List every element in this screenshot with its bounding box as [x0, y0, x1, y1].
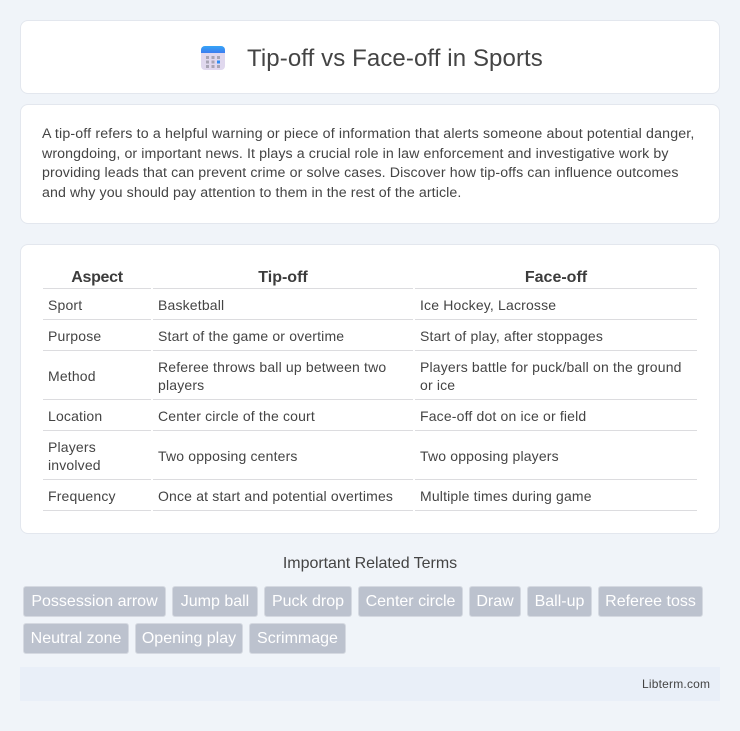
tag: [358, 586, 463, 617]
tag: [135, 623, 243, 654]
row: sport: [48, 297, 556, 313]
row: location: Location: [48, 408, 102, 424]
tag: Ball-up: [535, 593, 584, 610]
intro paragraph: [42, 126, 694, 201]
tag: [172, 586, 258, 617]
tag: Neutral zone: [31, 630, 121, 647]
tag: Opening play: [142, 630, 236, 647]
row: players involved: involved: [48, 457, 101, 473]
row: frequency: Once at start and potential overtimes: [158, 488, 393, 504]
tag: [249, 623, 346, 654]
footer credit: Libterm.com: [642, 677, 710, 691]
row: purpose: Start of the game or overtime: [158, 328, 344, 344]
intro paragraph: and why you should pay attention to them in the rest of the article.: [42, 185, 461, 201]
row: method: players: [158, 377, 204, 393]
panel: comparison table: [20, 244, 720, 534]
row: sport: Basketball: [158, 297, 224, 313]
intro paragraph: A tip-off refers to a helpful warning or piece of information that alerts someone about potential danger,: [42, 126, 694, 142]
row: location: [48, 408, 586, 424]
tag: [469, 586, 521, 617]
tag: [264, 586, 352, 617]
row: players involved: [48, 439, 559, 473]
tag: [527, 586, 592, 617]
tag: Center circle: [366, 593, 455, 610]
tag list: [23, 586, 703, 654]
row: location: Center circle of the court: [158, 408, 315, 424]
table header: Tip-off: [258, 269, 308, 286]
intro paragraph: providing leads that can prevent crime or solve cases. Discover how tip-offs can influence outcomes: [42, 165, 679, 181]
row: method: Players battle for puck/ball on the ground: [420, 359, 682, 375]
tag: Draw: [476, 593, 514, 610]
tag: [23, 623, 129, 654]
tag: Puck drop: [272, 593, 344, 610]
tag: Jump ball: [181, 593, 249, 610]
row: location: Face-off dot on ice or field: [420, 408, 586, 424]
table header: Face-off: [525, 269, 587, 286]
tag: [598, 586, 703, 617]
row: method: [48, 359, 682, 393]
tag: [23, 586, 166, 617]
row: frequency: Frequency: [48, 488, 116, 504]
row: method: or ice: [420, 377, 455, 393]
header panel: [20, 20, 720, 94]
comparison table: [43, 269, 697, 511]
row: purpose: Start of play, after stoppages: [420, 328, 603, 344]
row: method: Referee throws ball up between two: [158, 359, 386, 375]
row: sport: Sport: [48, 297, 82, 313]
row: method: Method: [48, 368, 96, 384]
row: frequency: Multiple times during game: [420, 488, 592, 504]
icon: calendar: [201, 46, 225, 70]
row: frequency: [48, 488, 592, 504]
intro paragraph: wrongdoing, or important news. It plays a crucial role in law enforcement and investigative work by: [42, 146, 669, 162]
panel: intro text: [20, 104, 720, 224]
table header: [71, 269, 588, 286]
footer bar: [20, 667, 720, 701]
tag: Referee toss: [605, 593, 696, 610]
row: purpose: [48, 328, 603, 344]
row: purpose: Purpose: [48, 328, 101, 344]
row: players involved: Two opposing players: [420, 448, 559, 464]
row: players involved: Players: [48, 439, 96, 455]
table header: Aspect: [71, 269, 123, 286]
tag: Possession arrow: [31, 593, 158, 610]
row: players involved: Two opposing centers: [158, 448, 298, 464]
tag: Scrimmage: [257, 630, 338, 647]
related terms heading: Important Related Terms: [283, 555, 457, 572]
title: Tip-off vs Face-off in Sports: [247, 45, 543, 72]
row: sport: Ice Hockey, Lacrosse: [420, 297, 556, 313]
